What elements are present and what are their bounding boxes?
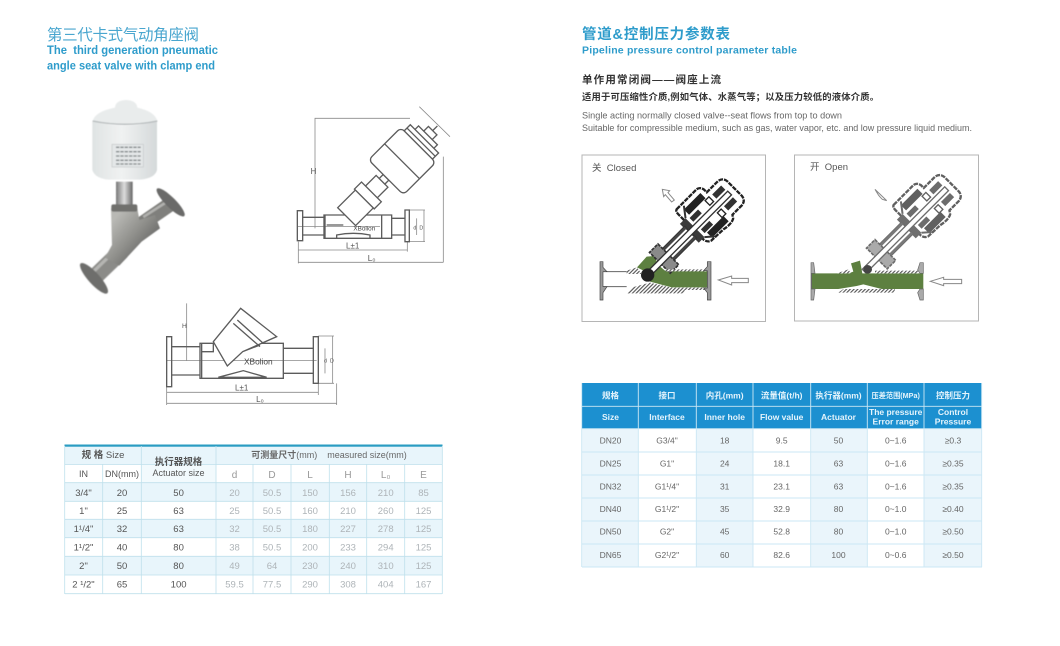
flow arrow: [718, 276, 748, 285]
upper right flange: [153, 185, 188, 220]
table header: L: [307, 470, 313, 481]
table row 1 1/4: 32: [117, 524, 127, 535]
table row DN65: DN65: [600, 550, 622, 560]
table row DN32: G1¹/4": [655, 482, 679, 492]
valve body outline: [167, 337, 318, 387]
table header: 可测量尺寸(mm) measured size(mm): [251, 449, 407, 460]
table header: 规 格 Size: [82, 449, 124, 461]
product photo: angle seat valve: [76, 100, 188, 297]
technical drawing: side view with dimensions: [297, 107, 455, 263]
table row DN32: 23.1: [773, 482, 790, 492]
table row 2 1/2: 100: [171, 580, 187, 590]
table header row Chinese: 接口: [658, 390, 676, 400]
table row 2 1/2: [72, 580, 431, 590]
heading: English table title: Pipeline pressure control parameter table: [582, 44, 797, 56]
table row 1: 25: [229, 506, 240, 517]
collar: [111, 204, 137, 212]
table row 2 1/2: 308: [340, 580, 356, 590]
table row DN20: DN20: [600, 435, 622, 445]
table row 3/4: [75, 488, 429, 499]
table row DN65: 82.6: [773, 550, 790, 560]
dimension lines: [297, 107, 450, 263]
table row DN40: [600, 504, 964, 514]
table header: E: [420, 470, 427, 481]
description: English body: Single acting normally closed valve--seat flows from top to down: [582, 110, 842, 120]
table row 3/4: 210: [378, 488, 394, 499]
dimension labels: [311, 167, 423, 263]
valve brand mark: XBolion: [244, 357, 273, 367]
table row 2: 50: [117, 561, 127, 572]
table row DN40: G1¹/2": [655, 504, 679, 514]
table row 3/4: 20: [117, 488, 127, 499]
table header row Chinese: 控制压力: [936, 390, 970, 400]
dimension lines: [167, 303, 337, 405]
table row 1 1/2: 50.5: [263, 542, 281, 554]
description: English body: [582, 110, 972, 133]
table row DN20: 50: [834, 435, 843, 445]
table row 1 1/2: 80: [173, 542, 184, 554]
table row DN65: 60: [720, 550, 730, 560]
dimension labels: L₀: [368, 254, 376, 263]
table row 2: 49: [229, 561, 240, 572]
description: English body: Suitable for compressible medium, such as gas, water vapor, etc. and low pressure liquid medium.: [582, 123, 972, 133]
actuator cross-section: [846, 166, 967, 287]
table row DN65: 0~0.6: [885, 550, 907, 560]
table row DN40: 80: [834, 504, 843, 514]
pipe walls: [837, 269, 918, 293]
table row DN20: G3/4": [656, 435, 678, 445]
table row 1: 210: [340, 506, 356, 517]
table row DN40: 32.9: [773, 504, 790, 514]
section drawing: [600, 170, 750, 300]
table row DN25: DN25: [600, 459, 622, 469]
table row 1: 160: [302, 506, 318, 517]
table: dimensions: [64, 444, 442, 594]
table row 3/4: 50: [173, 488, 184, 499]
dimension labels: D: [419, 225, 423, 231]
table row 1 1/2: 1¹/2": [74, 542, 93, 554]
dimension labels: H: [311, 167, 317, 176]
table row DN20: 0~1.6: [885, 435, 907, 445]
table row 2: 64: [267, 561, 277, 572]
table row 1 1/4: 180: [302, 524, 318, 535]
table header row English: Actuator: [821, 412, 857, 422]
table row 3/4: 20: [229, 488, 240, 499]
table row DN50: DN50: [600, 527, 622, 537]
table row 2: [79, 561, 431, 572]
heading: English product name: [47, 45, 219, 72]
left title block: [47, 26, 219, 72]
dimension labels: L±1: [346, 242, 360, 251]
table header: L₀: [381, 470, 391, 481]
table header row English: Flow value: [760, 412, 804, 422]
fluid: [812, 261, 923, 289]
table header row English: Control: [938, 407, 968, 417]
table row 2: 230: [302, 561, 318, 572]
table header row Chinese: 流量值(t/h): [761, 390, 803, 400]
table row DN25: 0~1.6: [885, 459, 907, 469]
table row 3/4: 50.5: [263, 488, 281, 499]
table row 1 1/4: 227: [340, 524, 356, 535]
table header row English: Inner hole: [704, 412, 745, 422]
table header: d: [232, 470, 237, 481]
table row 1 1/4: 50.5: [263, 524, 281, 535]
table row DN20: 18: [720, 435, 730, 445]
table row 2 1/2: 59.5: [225, 580, 244, 590]
table header: 执行器规格: [155, 456, 203, 468]
table row 2 1/2: 290: [302, 580, 318, 590]
dimension labels: d: [413, 225, 416, 231]
table header: [79, 449, 427, 481]
table row 2 1/2: 2 ¹/2": [72, 580, 95, 590]
table row 2 1/2: 77.5: [263, 580, 281, 590]
fluid: [637, 256, 711, 287]
panel frame: [794, 155, 978, 321]
table: pipeline pressure parameters: [582, 383, 982, 567]
upper right pipe: [140, 204, 170, 225]
table header row Chinese: 内孔(mm): [706, 390, 744, 400]
table row DN50: ≥0.50: [942, 527, 964, 537]
table header row English: [602, 407, 971, 426]
panel: open valve section: [794, 155, 978, 321]
table row 3/4: 3/4": [75, 488, 92, 499]
table row DN50: 0~1.0: [885, 527, 907, 537]
table header row English: The pressure: [869, 407, 923, 417]
table row DN32: DN32: [600, 482, 622, 492]
table header: D: [268, 470, 276, 481]
table row 1: 1": [79, 506, 88, 517]
table header: DN(mm): [105, 469, 139, 479]
air arrow: [875, 189, 887, 201]
table row 3/4: 156: [340, 488, 356, 499]
table header row Chinese: [602, 390, 970, 400]
table row 1: [79, 506, 431, 517]
table header background: [582, 383, 982, 429]
table backgrounds: [65, 446, 442, 594]
table row 1 1/2: [74, 542, 431, 554]
panel label: 关 Closed: [592, 162, 636, 174]
heading: English product name: angle seat valve with clamp end: [47, 60, 215, 72]
section drawing: [811, 166, 967, 300]
table row 1 1/4: 1¹/4": [74, 524, 93, 535]
table row DN25: 24: [720, 459, 730, 469]
plug: [641, 268, 654, 282]
table header row English: Size: [602, 412, 619, 422]
table row 1 1/4: 32: [229, 524, 240, 535]
table row 1 1/2: 40: [117, 542, 127, 554]
table row DN20: 9.5: [776, 435, 788, 445]
description: Chinese subtitle: 单作用常闭阀——阀座上流: [582, 73, 722, 86]
description: Chinese body: 适用于可压缩性介质,例如气体、水蒸气等；以及压力较低的液体介质。: [582, 91, 879, 103]
table header row Chinese: 压差范围(MPa): [872, 391, 920, 400]
technical drawing: lower view with dimensions: d: [324, 359, 327, 365]
panel label: 开 Open: [810, 162, 848, 173]
table row DN50: 45: [720, 527, 730, 537]
table row 1 1/2: 38: [229, 542, 240, 554]
table row 2: 80: [173, 561, 184, 572]
table row DN50: G2": [660, 527, 674, 537]
table header row Chinese: 执行器(mm): [815, 390, 862, 400]
table row 1 1/4: 125: [416, 524, 431, 535]
right title block: [582, 25, 797, 56]
actuator label plate: [112, 144, 143, 167]
table row DN25: [600, 459, 964, 469]
actuator cap: [93, 100, 157, 124]
table header row English: Error range: [873, 416, 919, 426]
lower left flange: [76, 260, 112, 297]
table row 2: 310: [378, 561, 394, 572]
table row 2 1/2: 167: [416, 580, 431, 590]
table row DN50: [600, 527, 964, 537]
stem: [116, 182, 133, 207]
table header: Actuator size: [152, 468, 205, 478]
table row 2 1/2: 65: [117, 580, 127, 590]
dimension labels: L±1: [235, 384, 249, 393]
table row 1 1/2: 233: [340, 542, 356, 554]
heading: Chinese table title: 管道&控制压力参数表: [582, 25, 730, 43]
valve body outline: [297, 210, 409, 242]
table row DN40: ≥0.40: [942, 504, 964, 514]
table row 1: 63: [173, 506, 184, 517]
table row DN25: G1": [660, 459, 674, 469]
table row DN40: DN40: [600, 504, 622, 514]
table row 1: 260: [378, 506, 394, 517]
lower left pipe: [97, 251, 122, 275]
table header: IN: [79, 469, 88, 479]
table row 1: 25: [117, 506, 127, 517]
description text: [582, 73, 972, 133]
table row DN65: 100: [831, 550, 846, 560]
table row 2: 125: [416, 561, 431, 572]
table row DN50: 80: [834, 527, 843, 537]
table row 1 1/4: 63: [173, 524, 184, 535]
table row DN32: 31: [720, 482, 730, 492]
table row 3/4: 85: [418, 488, 429, 499]
table row 1 1/2: 294: [378, 542, 394, 554]
panel: closed valve section: [582, 155, 766, 322]
table row 2: 2": [79, 561, 88, 572]
valve brand mark: XBolion: [353, 226, 376, 233]
table row DN20: ≥0.3: [945, 435, 962, 445]
table top rule: [64, 444, 442, 447]
flanges: [811, 263, 923, 300]
table header row English: Pressure: [935, 416, 971, 426]
table header: H: [344, 470, 352, 481]
table row 1 1/2: 125: [416, 542, 431, 554]
table row DN25: ≥0.35: [942, 459, 964, 469]
table row 1: 50.5: [263, 506, 281, 517]
table row DN25: 63: [834, 459, 843, 469]
heading: Chinese product name: 第三代卡式气动角座阀: [47, 26, 199, 44]
actuator cross-section: [629, 170, 750, 291]
technical drawing: lower view with dimensions: H: [182, 323, 187, 330]
table row DN40: 35: [720, 504, 730, 514]
air arrow: [662, 189, 674, 202]
table body columns: [582, 429, 982, 567]
table row 1 1/4: [74, 524, 431, 535]
table row 3/4: 150: [302, 488, 318, 499]
table row DN32: ≥0.35: [942, 482, 964, 492]
technical drawing: lower view with dimensions: [167, 303, 337, 405]
table row 2 1/2: 404: [378, 580, 394, 590]
angled actuator: [329, 108, 455, 234]
table row DN65: [600, 550, 964, 560]
table row DN40: 0~1.0: [885, 504, 907, 514]
table row DN65: ≥0.50: [942, 550, 964, 560]
pipe walls: [627, 267, 707, 293]
technical drawing: lower view with dimensions: L₀: [256, 395, 264, 404]
valve body: [105, 205, 160, 266]
flanges: [600, 262, 711, 300]
technical drawing: lower view with dimensions: D: [330, 359, 334, 365]
table row DN32: [600, 482, 964, 492]
table row DN32: 0~1.6: [885, 482, 907, 492]
table row 1 1/2: 200: [302, 542, 318, 554]
table row DN65: G2¹/2": [655, 550, 679, 560]
table row DN50: 52.8: [773, 527, 790, 537]
flow arrow: [930, 277, 962, 286]
table row 2: 240: [340, 561, 356, 572]
table header row Chinese: 规格: [602, 390, 619, 400]
table row DN25: 18.1: [773, 459, 790, 469]
table header row English: Interface: [649, 412, 685, 422]
table row 1 1/4: 278: [378, 524, 394, 535]
table row DN20: [600, 435, 962, 445]
heading: English product name: The third generation pneumatic: [47, 45, 219, 57]
angled actuator outline: [213, 308, 277, 366]
actuator body: [92, 121, 157, 180]
panel frame: [582, 155, 766, 322]
table row DN32: 63: [834, 482, 843, 492]
table row 1: 125: [416, 506, 431, 517]
plug: [863, 265, 872, 274]
